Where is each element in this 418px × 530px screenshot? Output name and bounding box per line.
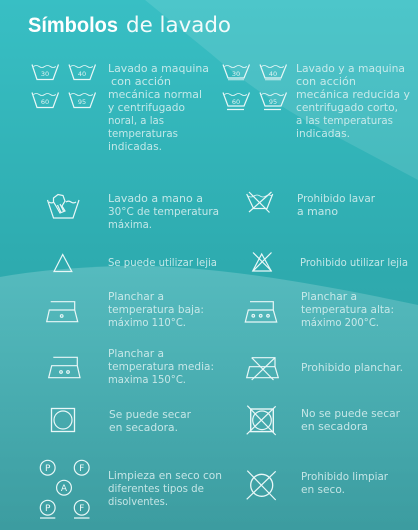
- text: hand wash: [108, 192, 219, 231]
- icon: no bleach: [253, 252, 272, 271]
- text: iron low: [108, 290, 204, 329]
- text: iron medium: [108, 347, 214, 386]
- icon group: normal machine wash: [32, 64, 96, 108]
- text: no hand wash: Prohibido lavar: [297, 192, 375, 205]
- text: reduced machine wash: indicadas.: [296, 127, 350, 140]
- title: Símbolos: [28, 14, 118, 37]
- icon group: normal machine wash: 40: [78, 70, 86, 78]
- icon group: normal machine wash: 95: [78, 98, 86, 106]
- text: iron low: temperatura baja:: [108, 303, 204, 316]
- text: dry clean solvents: Limpieza en seco con: [108, 469, 222, 482]
- text: no tumble dry: [301, 407, 400, 433]
- title: [28, 13, 231, 38]
- icon: bleach allowed: [54, 254, 72, 272]
- text: reduced machine wash: mecánica reducida y: [296, 88, 410, 101]
- text: iron high: temperatura alta:: [301, 303, 394, 316]
- text: dry clean solvents: disolventes.: [108, 495, 168, 508]
- text: normal machine wash: mecánica normal: [108, 88, 202, 101]
- icon: no dry clean: [247, 471, 276, 500]
- icon: dry clean solvents: P: [45, 464, 51, 474]
- text: iron medium: Planchar a: [108, 347, 164, 360]
- text: no tumble dry: No se puede secar: [301, 407, 400, 420]
- text: iron medium: maxima 150°C.: [108, 373, 186, 386]
- icon: dry clean solvents: F: [79, 464, 84, 474]
- icon: iron high: [245, 302, 277, 322]
- icon: hand wash: [48, 194, 79, 218]
- icon: dry clean solvents: [40, 460, 90, 518]
- text: normal machine wash: noral, a las: [108, 114, 164, 127]
- bottom light wave: [0, 266, 418, 530]
- text: no bleach: Prohibido utilizar lejia: [300, 256, 408, 269]
- text: reduced machine wash: a las temperaturas: [296, 114, 393, 127]
- icon: no ironing: [247, 358, 278, 380]
- icon: no tumble dry: [247, 406, 276, 435]
- text: no dry clean: [301, 470, 388, 496]
- text: reduced machine wash: con acción: [296, 75, 356, 88]
- text: normal machine wash: y centrifugado: [108, 101, 185, 114]
- top right light shape: [145, 0, 418, 180]
- icon: iron medium: [49, 357, 80, 378]
- text: normal machine wash: temperaturas: [108, 127, 178, 140]
- text: iron low: máximo 110°C.: [108, 316, 186, 329]
- text: normal machine wash: Lavado a maquina: [108, 62, 209, 75]
- text: tumble dry: en secadora.: [109, 421, 178, 434]
- text: iron high: máximo 200°C.: [301, 316, 379, 329]
- text: dry clean solvents: diferentes tipos de: [108, 482, 204, 495]
- text: normal machine wash: indicadas.: [108, 140, 162, 153]
- text: hand wash: Lavado a mano a: [108, 192, 203, 205]
- icon group: reduced machine wash: [223, 64, 286, 110]
- text: dry clean solvents: [108, 469, 222, 508]
- text: normal machine wash: [108, 62, 209, 153]
- icon group: normal machine wash: 30: [41, 70, 49, 78]
- text: reduced machine wash: Lavado y a maquina: [296, 62, 405, 75]
- icon: tumble dry: [52, 408, 74, 432]
- text: no dry clean: Prohibido limpiar: [301, 470, 388, 483]
- text: normal machine wash: con acción: [111, 75, 171, 88]
- text: no tumble dry: en secadora: [301, 420, 368, 433]
- text: iron low: Planchar a: [108, 290, 164, 303]
- text: bleach allowed: Se puede utilizar lejia: [108, 256, 217, 269]
- text: hand wash: máxima.: [108, 218, 152, 231]
- text: hand wash: 30°C de temperatura: [108, 205, 219, 218]
- icon group: reduced machine wash: 30: [232, 70, 240, 78]
- text: no hand wash: [297, 192, 375, 218]
- text: tumble dry: Se puede secar: [109, 408, 191, 421]
- text: iron high: [301, 290, 394, 329]
- icon group: normal machine wash: 60: [41, 98, 49, 106]
- icon: no hand wash: [247, 192, 273, 212]
- text: iron medium: temperatura media:: [108, 360, 214, 373]
- text: no dry clean: en seco.: [301, 483, 345, 496]
- icon group: reduced machine wash: 40: [269, 70, 277, 78]
- icon: iron low: [47, 302, 78, 322]
- text: no hand wash: a mano: [297, 205, 338, 218]
- text: reduced machine wash: [296, 62, 410, 140]
- text: reduced machine wash: centrifugado corto,: [296, 101, 398, 114]
- text: no ironing: Prohibido planchar.: [301, 361, 403, 374]
- icon: dry clean solvents: P: [45, 504, 51, 514]
- icon group: reduced machine wash: 60: [232, 98, 240, 106]
- icon group: reduced machine wash: 95: [269, 98, 277, 106]
- icon: dry clean solvents: F: [79, 504, 84, 514]
- icon: dry clean solvents: A: [61, 484, 68, 494]
- text: tumble dry: [109, 408, 191, 434]
- text: iron high: Planchar a: [301, 290, 357, 303]
- title: de lavado: [126, 13, 231, 38]
